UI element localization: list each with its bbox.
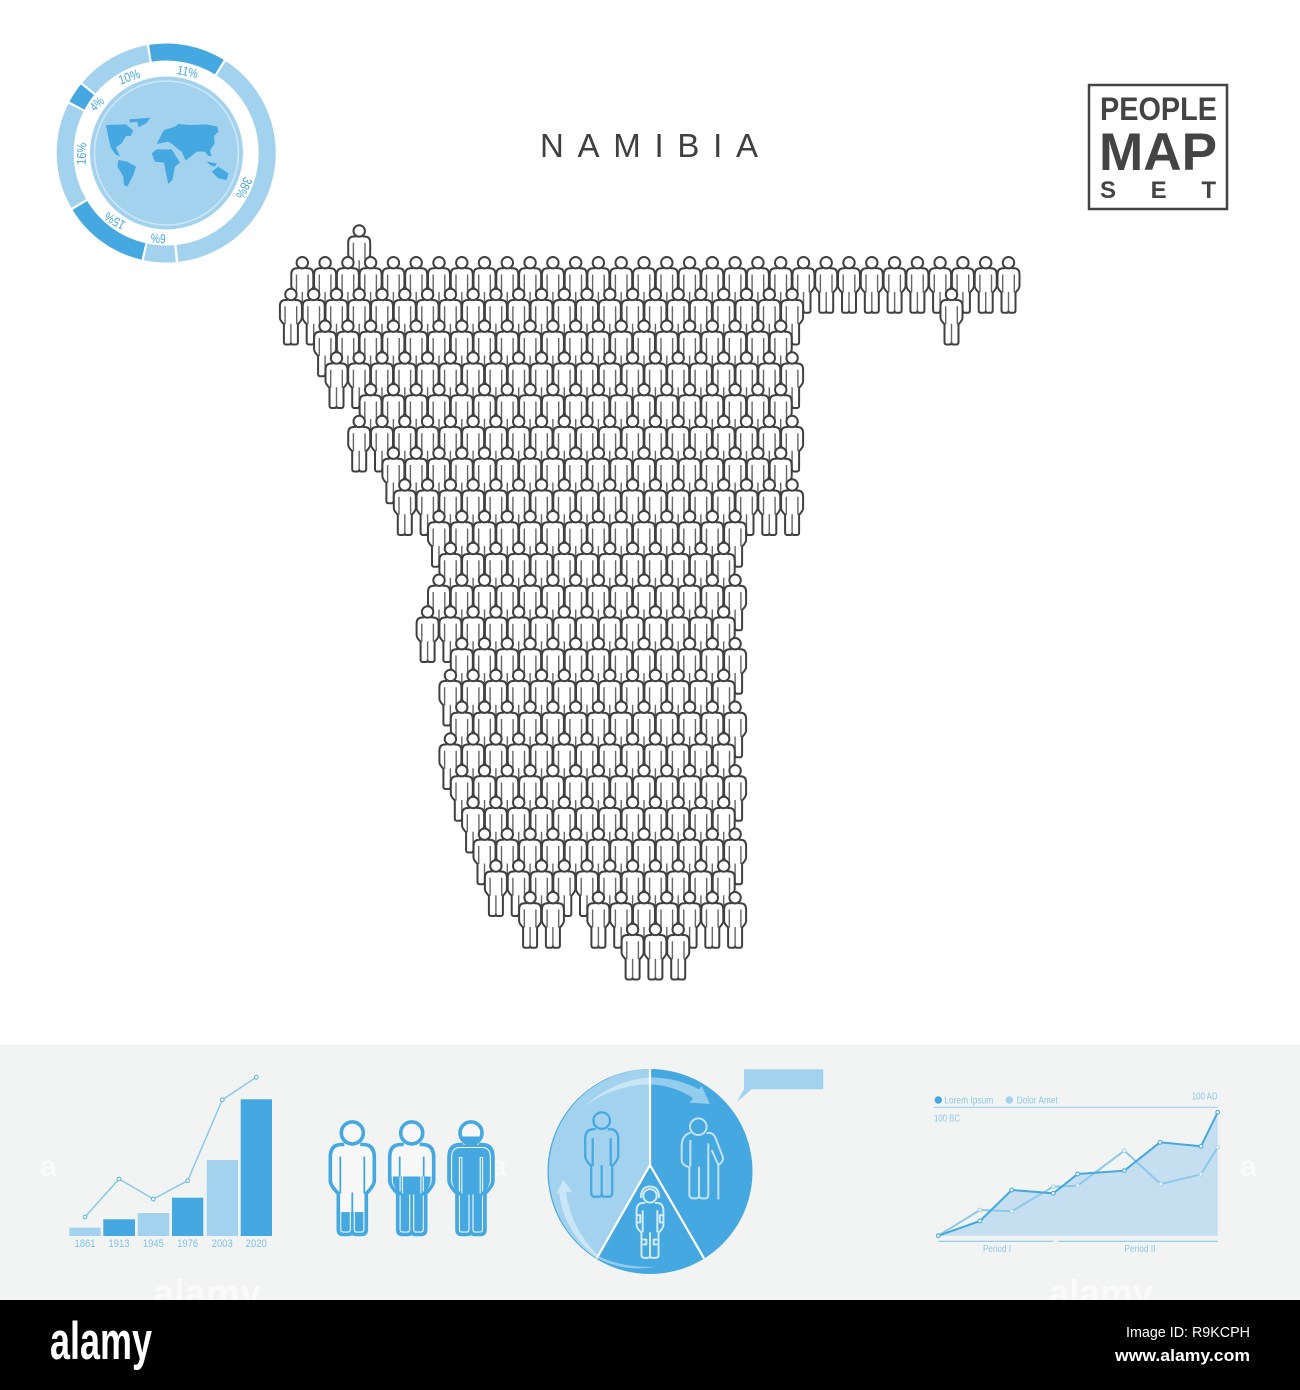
row 19 — [474, 828, 746, 884]
row 8 — [394, 479, 803, 535]
series: lorem ipsum — [936, 1110, 1220, 1238]
area fill — [938, 1112, 1218, 1236]
area line chart — [934, 1092, 1220, 1255]
row 16 — [439, 733, 735, 789]
title: NAMIBIA — [540, 127, 758, 164]
percentage labels: 10% — [116, 66, 142, 88]
year labels: 2020 — [246, 1238, 267, 1250]
footer text: website: www.alamy.com — [1114, 1346, 1250, 1365]
axis labels: 100 AD — [1192, 1092, 1218, 1102]
donut chart with world map — [24, 11, 308, 295]
row 14 — [439, 670, 735, 726]
year labels: 1913 — [108, 1238, 130, 1250]
bars — [69, 1099, 272, 1236]
row 3 — [314, 320, 792, 376]
watermark traces in band: alamy — [1049, 1273, 1153, 1315]
axis labels — [934, 1092, 1218, 1124]
period axis: Period II — [1124, 1244, 1156, 1255]
row 12 — [417, 606, 735, 662]
cycle arrows — [557, 1077, 710, 1268]
row 5 — [360, 384, 792, 440]
row 13 — [451, 638, 746, 694]
row 21 — [519, 892, 746, 948]
row 11 — [428, 574, 746, 630]
person icon: low fill — [326, 1122, 378, 1238]
percentage labels: 16% — [74, 142, 89, 165]
grey infographic band — [0, 1045, 1300, 1300]
percentage labels: 6% — [150, 231, 166, 246]
footer text: image id: Image ID: R9KCPH — [1126, 1324, 1250, 1341]
row 20 — [485, 860, 735, 916]
row 7 — [382, 448, 792, 503]
percentage labels: 4% — [87, 93, 107, 114]
people map: Namibia — [280, 225, 1019, 980]
inner disc — [90, 76, 243, 230]
year labels: 1945 — [143, 1238, 164, 1250]
period axis — [938, 1241, 1218, 1255]
row 10 — [439, 543, 735, 599]
row 9 — [428, 511, 746, 567]
pie light slice — [549, 1069, 650, 1258]
trend line — [83, 1075, 258, 1219]
row 2 — [280, 289, 962, 345]
badge: people map set — [1089, 85, 1227, 209]
person icon: mid fill — [386, 1122, 438, 1238]
year labels: 1861 — [74, 1238, 96, 1250]
legend: Lorem Ipsum — [944, 1096, 993, 1106]
three fill-level person icons — [326, 1122, 497, 1238]
year labels: 2003 — [212, 1238, 233, 1250]
badge: people map set: MAP — [1099, 123, 1217, 182]
footer bar — [0, 1300, 1300, 1390]
row 18 — [462, 797, 735, 853]
year labels: 1976 — [177, 1238, 198, 1250]
speech callout — [737, 1069, 823, 1102]
icon: child with headphones — [637, 1186, 663, 1258]
year labels — [74, 1238, 267, 1250]
percentage labels: 15% — [101, 209, 128, 233]
row 4 — [326, 352, 803, 408]
legend — [935, 1096, 1058, 1106]
world map — [106, 118, 228, 187]
badge: people map set: SET — [1100, 177, 1216, 204]
badge: people map set: PEOPLE — [1100, 91, 1217, 127]
watermark traces in band: a — [1240, 1150, 1257, 1183]
watermark traces in band: a — [40, 1150, 57, 1183]
watermark traces in band: a — [490, 1150, 507, 1183]
row 1 — [291, 257, 1020, 313]
bar chart with line — [69, 1075, 272, 1250]
period axis: Period I — [983, 1244, 1011, 1255]
legend: Dolor Amet — [1017, 1096, 1058, 1106]
row 22 — [622, 924, 689, 980]
pie chart with age group icons — [548, 1069, 823, 1274]
percentage labels: 11% — [176, 62, 200, 81]
person icon: high fill — [445, 1122, 497, 1238]
row 0 — [348, 225, 370, 281]
axis labels: 100 BC — [934, 1114, 960, 1124]
icon: adult — [585, 1112, 618, 1197]
watermark traces in band: alamy — [153, 1273, 261, 1315]
footer logo: alamy: alamy — [50, 1312, 152, 1371]
pie dividers — [597, 1069, 704, 1258]
percentage labels: 38% — [232, 175, 256, 201]
percentage labels — [74, 62, 256, 246]
pie base — [548, 1069, 752, 1274]
watermark traces in band — [40, 1150, 1257, 1315]
series: dolor amet — [938, 1145, 1220, 1236]
donut segments — [24, 11, 308, 295]
icon: elderly person with cane — [682, 1118, 723, 1199]
row 17 — [451, 765, 746, 821]
row 15 — [451, 702, 746, 757]
row 6 — [348, 416, 803, 472]
